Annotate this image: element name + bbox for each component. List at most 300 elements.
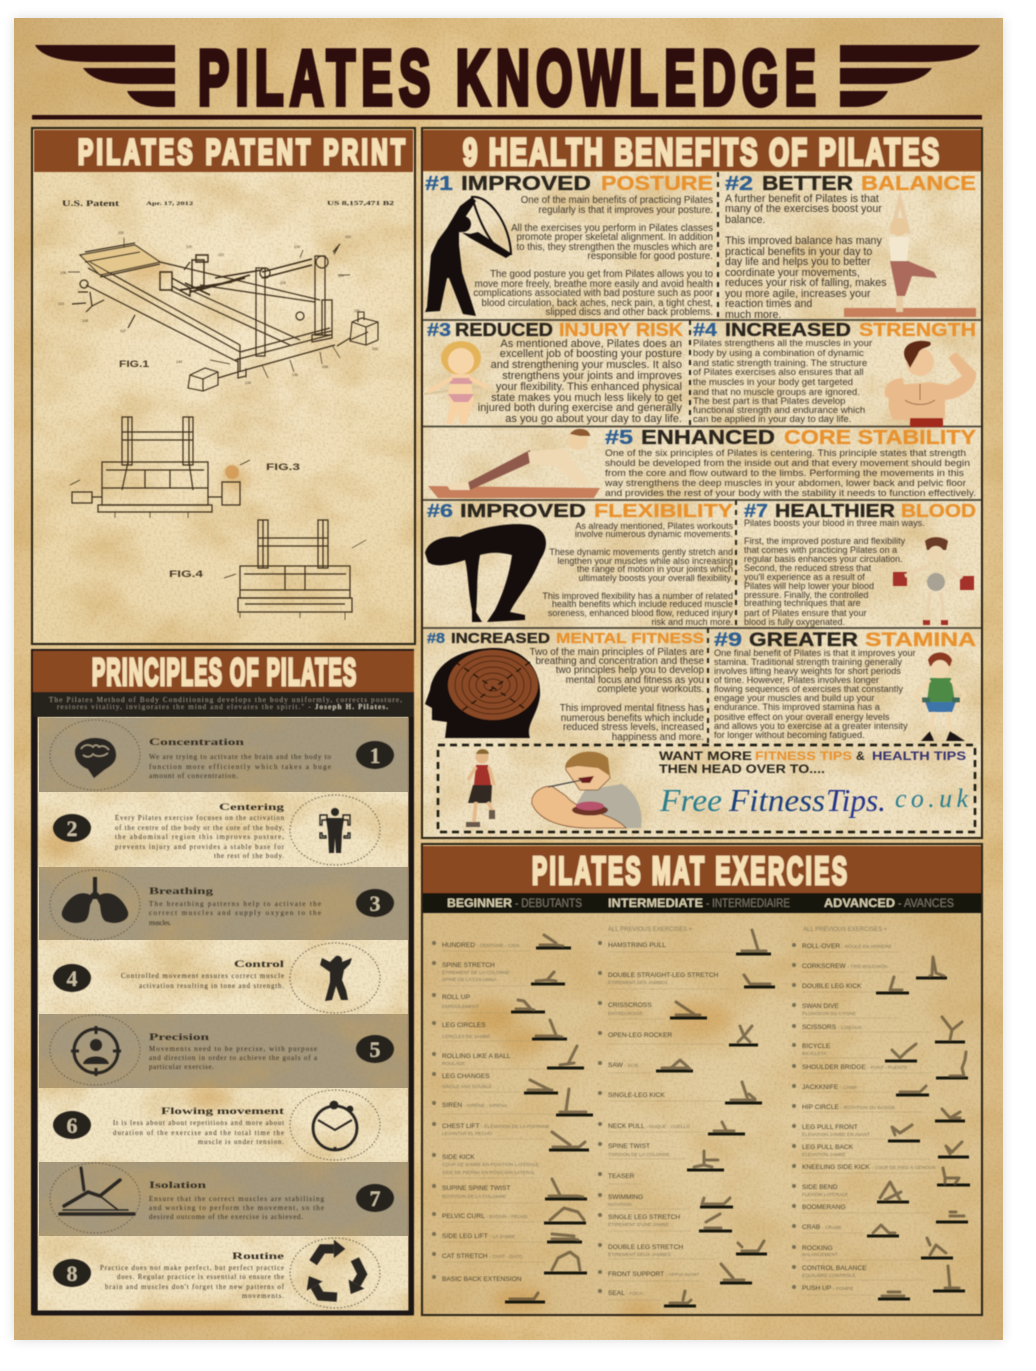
text: benefit 1: regularly is that it improves your posture. [539,205,713,216]
heading: benefit 2 [725,173,976,195]
heading: benefit 7: #7 [744,501,768,521]
text: centering: of the centre of the body or the core of the body, [115,825,284,832]
exercises: intermediate column [608,942,719,1297]
heading: benefit 6: IMPROVED [460,501,586,521]
column notes: ALL PREVIOUS EXERCISES + [803,927,888,933]
callout url: co.uk [895,784,968,813]
badge 5: 5 [370,1037,380,1062]
icon: stopwatch [313,1102,357,1150]
panel: 9 health benefits [422,128,982,838]
text: benefit 2: day life and helps you to better [725,256,871,268]
exercises: beginner column: CHEST LIFT - ÉLÉVATION DE LA POITRINE [442,1123,549,1130]
title: PILATES KNOWLEDGE [198,34,816,121]
header bar: principles [33,651,414,692]
heading: benefits: 9 HEALTH BENEFITS OF PILATES [463,131,939,173]
exercises: beginner column: LEG CIRCLES [442,1022,486,1029]
text: benefit 9: of time. However, Pilates involves longer [714,675,879,685]
text: benefit 8: This improved mental fitness has [560,703,704,714]
text: benefit 8: reduced stress levels, increased [563,722,704,733]
quote band: restores vitality, invigorates the mind and elevates the spirit." - Joseph H. Pilates. [57,703,388,711]
figure 1 labels [58,231,378,385]
exercises: beginner column: ENROULEMENT [442,1004,479,1010]
text: benefit 3: your flexibility. This enhanced physical [496,381,682,393]
text: routine [100,1251,285,1300]
exercises: advanced column: BOOMERANG [802,1204,846,1211]
illustration: hoop silhouette [425,197,512,316]
exercise bullets [432,941,796,1293]
heading: benefit 5: ENHANCED [641,427,775,449]
text: benefit 5: way strengthens the deep muscles in your abdomen, lower back and pelvic floor [604,478,966,488]
text: benefit 3: state makes you much less likely to get [491,392,682,404]
level band: - DEBUTANTS [515,896,582,910]
illustration: forward bend silhouette [425,524,546,622]
exercises: beginner column: SINGLE AND DOUBLE [442,1084,492,1090]
text: benefit 3: As mentioned above, Pilates does an [500,338,682,350]
text: benefit 3: strengthens your joints and improves [502,370,682,382]
text: benefit 1: One of the main benefits of practicing Pilates [521,195,713,206]
exercises: advanced column: ÉQUILIBRE CONTRÔLÉ [802,1272,856,1279]
principle 2: centering [53,795,380,865]
text: isolation: and working to perform the movement, so the [149,1204,324,1212]
figure 1 labels: 102 [118,231,124,235]
heading: benefit 6: #6 [427,501,453,521]
text: benefit 7: part of Pilates ensure that your [744,608,867,618]
heading: benefit 4: #4 [693,320,717,340]
heading: benefit 7 [744,501,976,521]
text: centering: prevents injury and provides a stable base for [115,844,285,851]
heading: benefit 4 [693,320,976,340]
text: precision: particular exercise. [149,1063,214,1071]
illustration: muscle man [884,341,976,427]
exercises: intermediate column: ÉTIREMENT DEUX JAMBES [608,1251,671,1258]
illustration: runner [466,749,495,827]
heading: benefit 2: BALANCE [861,173,976,195]
text: benefit 9: positive effect on your overall energy levels [714,712,890,722]
figure 1 labels: 130 [294,245,300,249]
callout url [659,782,968,818]
text: benefit 3: as you go about your day to day life. [505,413,682,425]
text: benefit 4 [693,338,873,425]
badge 3: 3 [370,891,380,916]
heading: benefit 3: INJURY RISK [559,320,683,340]
text: benefit 4: and that no muscle groups are ignored. [693,387,860,398]
exercises: intermediate column: TORSION DE LA COLONNE [608,1152,670,1158]
text: benefit 6: ultimately boosts your overall flexibility. [579,573,733,583]
text: benefit 2: reaction times and [725,298,812,310]
exercises: intermediate column: ÉTIREMENT DES JAMBES [608,979,667,986]
text: concentration [149,737,331,780]
text: precision: Movements need to be precise, with purpose [149,1045,317,1053]
text: benefit 1: The good posture you get from Pilates allows you to [490,269,713,280]
exercises: intermediate column: OPEN-LEG ROCKER [608,1032,672,1039]
benefit 3: injury risk [424,320,683,425]
text: benefit 1: promote proper skeletal alignment. In addition [516,232,713,243]
exercises: beginner column: ROLLING LIKE A BALL [442,1053,511,1060]
quote band [33,692,414,717]
level band: BEGINNER [447,896,512,910]
text: benefit 6: involve numerous dynamic movements. [575,529,733,539]
icon: left wing [35,45,175,107]
exercises: advanced column: SWAN DIVE [802,1003,839,1010]
exercises: beginner column: ROLL UP [442,994,471,1001]
heading: principles: PRINCIPLES OF PILATES [92,652,356,694]
heading: mat: PILATES MAT EXERCIES [532,849,847,893]
principle 8: routine [53,1238,380,1309]
illustration: cartoon woman [424,341,488,424]
figure 1 labels: 120 [186,245,192,249]
exercises: beginner column: BASIC BACK EXTENSION [442,1276,522,1283]
text: benefit 9: flowing sequences of exercises that constantly [714,684,903,694]
exercises: beginner column: PELVIC CURL - BASSIN - PELVIS [442,1213,528,1220]
exercise icons: intermediate column [656,930,775,1306]
exercises: beginner column: LEVANTAR EL PECHO [442,1131,492,1137]
figure 1 labels: 122 [218,253,224,257]
text: benefit 8: two principles help you to develop [556,665,705,676]
text: benefit 6: As already mentioned, Pilates workouts [575,521,733,531]
exercises: intermediate column: ÉTIREMENT D'UNE JAMBE [608,1221,669,1228]
exercises: advanced column [802,943,936,1292]
text: benefit 7: Second, the reduced stress that [744,563,872,573]
principle 3: breathing [50,870,394,940]
text: benefit 6: the range of motion in your joints which [577,564,733,574]
exercises: intermediate column: CRISSCROSS [608,1002,652,1009]
text: isolation: Ensure that the correct muscles are stabilising [149,1195,324,1203]
icon: target [71,1026,121,1076]
text: benefit 8: breathing and concentration and these [535,656,704,667]
text: control: activation resulting in tone and strength. [139,983,284,990]
callout url: Tips. [826,782,886,818]
text: benefit 8: mental focus and fitness as you [566,675,704,686]
patent header text: U.S. Patent [62,198,119,208]
text: control: Controlled movement ensures correct muscle [121,973,284,980]
text: benefit 5: from the core and flow outward to the limbs. Performing the movements in this [605,468,965,478]
header bar: benefits [423,130,981,171]
figure 1 patent drawing [68,238,378,391]
heading: benefit 9: #9 [714,630,742,651]
text: isolation: desired outcome of the exercise is achieved. [149,1213,303,1221]
panel: benefits background [423,172,981,837]
text: benefit 7: that comes with practicing Pilates on a [744,545,897,555]
text: benefit 6: lengthen your muscles while also increasing [557,556,733,566]
text: flowing movement: duration of the exercise and the total time the [113,1130,284,1137]
panel: pilates patent print [32,128,415,644]
text: benefit 7: breathing techniques that are [744,598,861,608]
text: benefit 1 [473,195,714,318]
level band: - INTERMEDIAIRE [706,896,790,910]
text: benefit 2: many of the exercises boost your [725,203,882,215]
heading: benefit 2: BETTER [762,173,854,195]
exercises: intermediate column: SEAL - FOCA [608,1290,644,1297]
text: benefit 9: stamina. Traditional strength training generally [714,657,902,667]
figure 1 labels: 106 [60,271,66,275]
column notes: ALL PREVIOUS EXERCISES + [608,927,693,933]
text: benefit 9: for longer without becoming fatigued. [714,730,865,740]
text: breathing: The breathing patterns help to activate the [149,900,321,908]
heading: benefit 1: #1 [425,173,453,195]
text: precision [149,1032,318,1071]
text: benefit 7: pressure. Finally, the controlled [744,590,868,600]
heading: patent: PILATES PATENT PRINT [78,133,405,172]
text: isolation [149,1180,324,1221]
exercises: beginner column: LEG CHANGES [442,1073,490,1080]
text: benefit 9: endurance. This improved stamina has a [714,702,881,712]
text: benefit 5: and provides the rest of your body with the stability it needs to function effectively. [605,488,976,498]
text: benefit 6: These dynamic movements gently stretch and [549,547,733,557]
illustration: dumbbell figure [893,537,974,625]
text: concentration: function more efficiently which takes a huge [149,763,331,771]
text: benefit 1: to this, they strengthen the muscles which are [516,242,713,253]
text: benefit 9: One final benefit of Pilates is that it improves your [714,648,916,658]
text: benefit 8: Two of the main principles of Pilates are [529,647,705,658]
text: benefit 6: risk and much more. [651,617,733,627]
text: benefit 5: One of the six principles of Pilates is centering. This principle states that strength [605,448,966,458]
text: concentration: Concentration [149,737,244,747]
icon: recycle [301,1240,375,1309]
text: benefit 4: The best part is that Pilates develop [693,396,846,407]
text: benefit 4: can be applied in your day to day life. [693,414,851,425]
text: benefit 7: Pilates boosts your blood in three main ways. [744,518,925,528]
panel: patent background [33,130,414,643]
text: benefit 2: much more. [725,309,781,321]
badge 7: 7 [370,1186,380,1211]
text: benefit 6: soreness, enhanced blood flow, reduced injury [548,608,733,618]
illustration: tree pose [844,200,976,317]
text: benefit 7 [744,518,925,627]
patent header text [62,198,394,208]
exercises: beginner column: HUNDRED - CENTAINE - CIEN [442,942,520,949]
exercises: intermediate column: FRONT SUPPORT - APPUI AVANT [608,1271,699,1278]
callout text: & [856,749,865,763]
text: routine: brain and muscles don't forget the new patterns of [105,1284,285,1291]
figure 1 labels: 100 [345,235,351,239]
heading: benefit 5: CORE STABILITY [784,427,977,449]
badge 4: 4 [66,966,78,991]
text: routine: does. Regular practice is essential to ensure the [117,1274,284,1281]
text: centering [115,802,285,860]
callout text [659,749,966,776]
exercises: advanced column: ROCKING [802,1245,833,1252]
heading: benefit 3: #3 [427,320,451,340]
text: benefit 3 [478,338,682,425]
exercises: advanced column: LEG PULL FRONT [802,1124,858,1131]
level band [423,893,981,913]
figure 1 labels: 134 [245,381,251,385]
text: routine: movements. [242,1293,284,1300]
patent header text: US 8,157,471 B2 [327,201,394,207]
icon: centred figure [320,808,350,853]
quote band: The Pilates Method of Body Conditioning develops the body uniformly, corrects posture, [49,696,402,704]
panel: pilates mat exercises [422,844,982,1315]
text: benefit 6: health benefits which include reduced muscle [552,599,733,609]
exercises: beginner column: CERCLES DE JAMBE [442,1034,490,1040]
illustration: cartoon man with dumbbells [915,652,965,741]
text: breathing: Breathing [149,886,214,896]
figure 1 labels: 136 [292,373,298,377]
heading: benefit 8: MENTAL FITNESS [556,630,704,647]
panel: principles of pilates [32,650,414,1314]
text: benefit 9: involves lifting heavy weights for short periods [714,666,901,676]
text: centering: the rest of the body. [214,853,284,860]
badge 4 [53,964,91,992]
figure 1 labels: 114 [338,274,344,278]
benefit 2: balance [725,173,976,321]
exercises: beginner column: SPINE STRETCH [442,962,495,969]
figure 1 labels: 138 [322,365,328,369]
text: control [121,959,285,990]
exercises: beginner column: ÉTIREMENT DE LA COLONNE [442,969,510,976]
principle 4: control [53,943,380,1013]
heading: benefit 5 [605,427,977,449]
figure 1 labels: 160 [354,309,360,313]
exercises: beginner column: CAT STRETCH - CHAT - GATO [442,1253,523,1260]
text: benefit 6 [542,521,733,627]
text: benefit 2 [725,193,887,321]
heading: benefit 4: STRENGTH [859,320,976,340]
text: routine: Routine [232,1251,284,1261]
exercises: advanced column: SHOULDER BRIDGE - PONT - PUENTE [802,1064,907,1071]
label: fig 4: FIG.4 [169,569,203,579]
exercises: beginner column [442,942,549,1283]
exercise icons: advanced column [867,957,970,1299]
exercise rules [442,951,930,1300]
principle 5: precision [50,1015,394,1085]
principle 1: concentration [50,720,394,790]
exercises: intermediate column: SPINE TWIST [608,1143,650,1150]
text: benefit 4: the muscles in your body get targeted [693,377,853,388]
exercises: advanced column: ÉLÉVATION JAMBE EN AVANT [802,1131,870,1138]
text: precision: Precision [149,1032,209,1042]
exercises: advanced column: PLONGEON DU CYGNE [802,1011,856,1017]
heading: benefit 8: #8 [427,630,445,647]
exercises: advanced column: FLEXION LATÉRALE [802,1191,848,1198]
text: benefit 1: responsible for good posture. [588,251,713,262]
exercises: intermediate column: DOUBLE LEG STRETCH [608,1244,683,1251]
text: concentration: We are trying to activate the brain and the body to [149,753,331,761]
label: fig 3: FIG.3 [266,462,300,472]
text: benefit 4: Pilates strengthens all the muscles in your [693,338,873,349]
figure 4 patent drawing [224,520,366,620]
exercises: advanced column: PUSH UP - POMPE [802,1285,853,1292]
badge 3 [356,889,394,917]
text: benefit 1: slipped discs and other back problems. [546,307,713,318]
exercises: advanced column: CONTROL BALANCE [802,1265,867,1272]
text: benefit 8: happiness and more. [612,732,704,743]
text: benefit 3: excellent job of boosting your posture [500,348,682,360]
exercises: intermediate column: NECK PULL - NUQUE - CUELLO [608,1123,690,1130]
callout url: Free [659,782,722,818]
exercises: intermediate column: NATATION [608,1202,632,1208]
title rule [32,115,982,120]
exercises: intermediate column: HAMSTRING PULL [608,942,666,949]
exercises: beginner column: ROTATION DE LA COLONNE [442,1194,506,1200]
text: benefit 3: and strengthening your muscles. It also [491,359,682,371]
principle 7: isolation [50,1163,394,1233]
figure 1 labels: 108 [82,319,88,323]
text: benefit 7: First, the improved posture and flexibility [744,536,906,546]
badge 6: 6 [66,1113,78,1138]
exercises: beginner column: SIDE LEG LIFT - LA JAMBE [442,1233,515,1240]
exercises: advanced column: BICYCLE [802,1043,831,1050]
text: benefit 2: This improved balance has many [725,235,882,247]
text: benefit 5 [604,448,976,498]
exercises: advanced column: SCISSORS - CISEAUX [802,1024,863,1031]
heading: benefit 5: #5 [605,427,633,449]
text: flowing movement: Flowing movement [161,1106,284,1116]
icon: lungs [62,877,128,923]
badge 8 [53,1259,91,1287]
text: benefit 2: practical benefits in your day to [725,246,872,258]
exercises: beginner column: SPINE DE LA COLUMNA [442,977,497,983]
icon: bodybuilder [320,956,352,1001]
text: benefit 4: body by using a combination of dynamic [693,348,864,359]
exercises: advanced column: BICICLETA [802,1051,827,1057]
column notes [608,927,888,933]
badge 7 [356,1184,394,1212]
text: benefit 1: complications associated with bad posture such as poor [473,288,714,299]
text: flowing movement: It is less about about repetitions and more about [113,1120,284,1127]
icon: head with brain [75,738,116,778]
text: centering: Centering [219,802,285,812]
exercises: advanced column: CORKSCREW - TIRE-BOUCHON [802,963,888,970]
text: benefit 2: you more agile, increases your [725,288,871,300]
cell dividers [423,320,981,628]
heading: benefit 7: HEALTHIER [775,501,895,521]
text: isolation: Isolation [149,1180,206,1190]
patent header text: Apr. 17, 2012 [146,202,194,207]
exercises: beginner column: ROULADE [442,1061,465,1067]
benefit 8: mental fitness [425,630,705,743]
exercises: beginner column: SIDE DE PIERNA EN POSICION LATERAL [442,1170,536,1176]
level band: ADVANCED [824,896,895,910]
level band: - AVANCES [898,896,954,910]
level band: INTERMEDIATE [608,896,703,910]
label: fig 1: FIG.1 [119,359,149,369]
exercises: beginner column: COUP DE JAMBE EN POSITION LATÉRALE [442,1161,539,1168]
text: benefit 1: blood circulation, back aches, neck pain, a tight chest, [481,298,713,309]
text: flowing movement: muscle is under tension. [198,1139,284,1146]
badge 8: 8 [66,1261,78,1286]
exercises: beginner column: SUPINE SPINE TWIST [442,1185,510,1192]
text: benefit 5: should be developed from the inside out and that every movement should begin [605,458,970,468]
benefit 9: stamina [714,630,976,741]
text: precision: and direction in order to achieve the goals of a [149,1054,318,1062]
exercises: advanced column: HIP CIRCLE - ROTATION DU BASSIN [802,1104,895,1111]
illustration: man eating [532,752,642,828]
text: benefit 4: of Pilates exercises also ensures that all [693,367,864,378]
figure 1 labels: 112 [120,329,126,333]
text: benefit 2: coordinate your movements, [725,267,860,279]
exercises: intermediate column: SINGLE-LEG KICK [608,1092,665,1099]
callout: free fitness tips [438,745,975,832]
heading: benefit 9: GREATER [749,630,858,651]
text: breathing: muscles. [149,919,171,927]
badge 1: 1 [370,743,380,768]
text: breathing [149,886,321,927]
heading: benefit 3 [427,320,683,340]
heading: benefit 6 [427,501,733,521]
exercises: advanced column: LEG PULL BACK [802,1144,854,1151]
heading: benefit 6: FLEXIBILITY [594,501,733,521]
exercises: intermediate column: DOUBLE STRAIGHT-LEG STRETCH [608,972,719,979]
heading: benefit 9 [714,630,976,651]
text: benefit 6: This improved flexibility has a number of related [542,591,733,601]
callout text: THEN HEAD OVER TO.... [659,762,825,776]
text: benefit 8: numerous benefits which include [561,713,704,724]
benefit 5: core stability [428,427,977,498]
header bar: patent [34,130,413,172]
benefit 1: posture [425,173,714,318]
exercise icons: beginner column [505,935,593,1302]
